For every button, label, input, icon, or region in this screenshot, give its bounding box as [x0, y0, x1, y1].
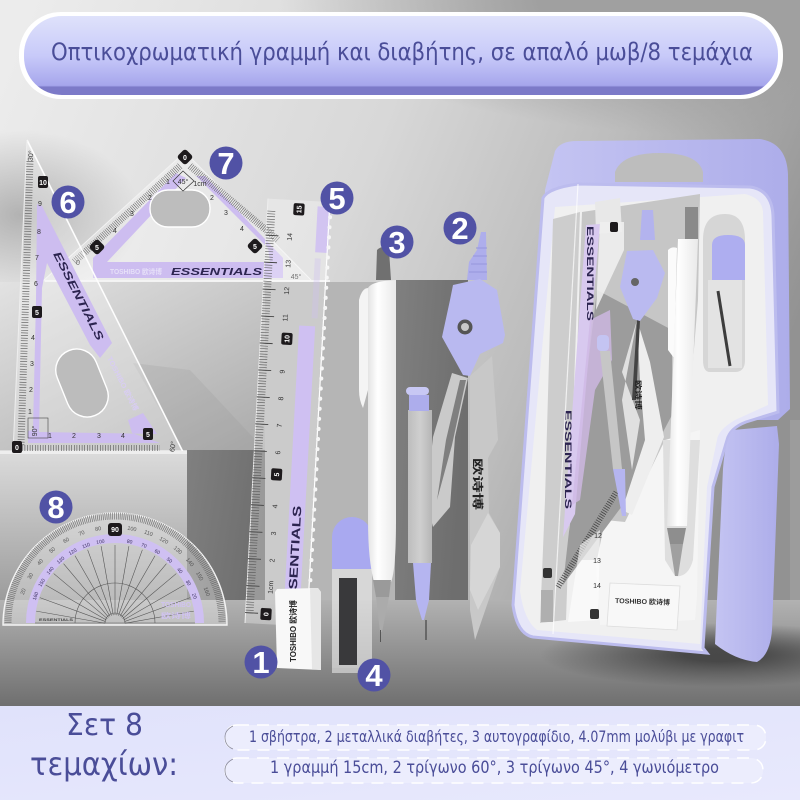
ruler ticks — [250, 209, 271, 613]
outer scale numbers: 110 — [143, 530, 153, 538]
protractor (item 8): ESSENTIALS — [39, 617, 73, 622]
scale numbers: 1cm — [193, 181, 207, 188]
compass right leg — [470, 356, 500, 640]
scale numbers: 15 — [296, 205, 304, 213]
triangle 45 degree (item 7) — [43, 149, 312, 281]
degree ticks — [8, 516, 222, 623]
outer scale numbers: 60 — [62, 537, 71, 545]
scale numbers: 8 — [278, 396, 285, 401]
number badge 6: 6 — [59, 185, 77, 220]
left recess — [540, 212, 580, 623]
purple stripe — [28, 204, 160, 443]
scale numbers: 0 — [263, 612, 271, 616]
scale numbers: 0 — [183, 155, 187, 162]
triangle 60 degree (item 6) — [0, 140, 187, 454]
clear lid fold line — [553, 184, 578, 634]
protractor (item 8): TOSHIBO — [161, 602, 192, 609]
scale numbers: 9 — [280, 369, 287, 374]
number badge 1 — [244, 645, 278, 680]
45 degree marker: 45° — [178, 178, 188, 186]
footer heading: τεμαχίων: — [30, 745, 178, 783]
pen recess — [663, 440, 700, 576]
inner ring numbers: 150 — [38, 578, 47, 588]
inner ring numbers: 50 — [165, 557, 173, 565]
number badge 4: 4 — [365, 658, 383, 693]
90 degree badge — [108, 523, 122, 536]
scale numbers: 2 — [148, 195, 152, 202]
contents line 2 — [225, 758, 763, 783]
protractor (item 8): 欧诗博 — [161, 611, 191, 620]
eraser inside case — [607, 583, 680, 630]
inner ring numbers: 30 — [184, 579, 192, 587]
scale numbers: 3 — [271, 531, 278, 536]
radial lines — [35, 545, 195, 623]
eraser (item 1): TOSHIBO 欧诗博 — [288, 600, 298, 662]
outer scale numbers: 40 — [36, 558, 45, 567]
rulers inside case: 14 — [593, 583, 601, 590]
scale numbers: 4 — [31, 335, 35, 342]
scale numbers: 2 — [210, 195, 214, 202]
footer panel — [0, 706, 800, 800]
inner ring numbers: 130 — [56, 556, 66, 566]
outer scale numbers: 140 — [184, 557, 195, 568]
outer scale numbers: 150 — [194, 571, 204, 582]
compass inside case — [620, 210, 665, 515]
outer scale numbers: 100 — [127, 526, 137, 533]
scale numbers: 1 — [28, 409, 32, 416]
scale numbers — [12, 176, 153, 453]
scale numbers: 9 — [38, 201, 42, 208]
inner ring numbers: 120 — [68, 547, 78, 557]
graphite lead case (item 4) — [332, 517, 372, 673]
outer scale numbers: 20 — [20, 588, 28, 596]
compass brand text: 欧诗博 — [471, 458, 485, 510]
eraser (item 1) — [275, 588, 321, 670]
compass inside case: 欧诗博 — [634, 380, 643, 410]
90 degree badge: 90 — [111, 527, 119, 534]
main recess — [570, 194, 700, 560]
scale numbers: 5 — [95, 245, 99, 252]
back lid with handle — [545, 139, 790, 420]
outer scale numbers: 30 — [27, 572, 35, 581]
mechanical pencil — [406, 387, 432, 640]
outer scale numbers: 50 — [48, 546, 57, 555]
contents line 1 — [225, 725, 766, 750]
number badge 5: 5 — [328, 181, 346, 216]
scale numbers: 1cm — [268, 580, 275, 594]
scale numbers: 7 — [35, 255, 39, 262]
number badge 3 — [380, 225, 414, 260]
inner ring numbers: 100 — [96, 539, 105, 546]
scale numbers: 10 — [39, 180, 47, 187]
compass left leg — [426, 373, 468, 527]
pencil inside case — [597, 335, 626, 516]
scale numbers: 0 — [76, 260, 80, 267]
inner ring numbers: 80 — [126, 539, 133, 546]
scale numbers: 4 — [121, 433, 125, 440]
number badge 2 — [444, 211, 476, 246]
outer scale numbers — [20, 526, 211, 597]
inner ring numbers: 60 — [153, 548, 161, 556]
rulers inside case: 13 — [593, 558, 601, 565]
scale numbers: 0 — [15, 445, 19, 452]
contents line 2: 1 γραμμή 15cm, 2 τρίγωνο 60°, 3 τρίγωνο 45°, 4 γωνιόμετρο — [270, 758, 719, 778]
scale numbers: 3 — [224, 210, 228, 217]
lead case inside case — [703, 214, 745, 372]
angle marker: 60° — [168, 441, 178, 453]
triangle 60 degree (item 6): TOSHIBO 欧诗博 — [105, 355, 140, 412]
rulers inside case — [541, 222, 672, 622]
scale numbers: 2 — [72, 433, 76, 440]
label: essentials on ruler: SENTIALS — [286, 505, 304, 590]
rulers inside case: ESSENTIALS — [563, 410, 573, 509]
compass screw — [458, 320, 472, 334]
number badge 7 — [210, 146, 242, 181]
lower white tray block — [596, 430, 700, 625]
white tray — [520, 194, 768, 644]
inner ring numbers: 20 — [190, 593, 198, 600]
angle marker: 30° — [27, 150, 35, 161]
inner ring numbers: 160 — [32, 591, 40, 601]
scale numbers: 13 — [285, 260, 293, 268]
front lower-right lid — [715, 426, 779, 662]
wavy edge — [308, 207, 331, 606]
outer scale numbers: 80 — [95, 526, 102, 533]
scale numbers: 14 — [287, 233, 294, 241]
inner ring numbers: 140 — [46, 566, 56, 576]
footer heading: Σετ 8 — [66, 708, 143, 743]
outer scale numbers: 130 — [172, 545, 183, 556]
compass head — [442, 279, 505, 376]
number badge 8: 8 — [47, 490, 65, 525]
ruler ticks on left edge — [74, 166, 180, 262]
rulers inside case: ESSENTIALS — [585, 226, 595, 321]
number badge 7: 7 — [217, 146, 235, 181]
scale numbers: 8 — [37, 229, 41, 236]
inner ring numbers: 110 — [81, 542, 91, 550]
scale numbers: 1 — [48, 433, 52, 440]
clear lid outline — [513, 184, 778, 653]
number badge 6 — [52, 185, 84, 220]
scale numbers: 10 — [284, 335, 292, 343]
oval hole — [49, 343, 115, 423]
pen inside case — [667, 207, 698, 576]
inner ring numbers: 40 — [175, 567, 184, 575]
scale numbers: 3 — [97, 433, 101, 440]
inner ring numbers — [32, 539, 198, 601]
scale numbers — [260, 202, 305, 621]
ruler 15cm (item 5) — [245, 199, 331, 626]
number badge 5 — [320, 181, 354, 216]
outer scale numbers: 160 — [202, 586, 211, 597]
number badge 2: 2 — [451, 211, 469, 246]
scale numbers: 11 — [282, 314, 290, 322]
number badge 3: 3 — [388, 225, 406, 260]
scale numbers: 6 — [34, 281, 38, 288]
scale numbers: 4 — [240, 226, 244, 233]
scale numbers: 45° — [291, 273, 301, 281]
scale numbers: 4 — [113, 228, 117, 235]
scale numbers — [76, 149, 301, 281]
45 degree marker — [173, 171, 194, 191]
pencil case (open, with contents) — [513, 139, 790, 662]
scale numbers: 1 — [166, 179, 170, 186]
compass knob — [467, 232, 487, 280]
centre hole — [150, 190, 210, 227]
scale numbers: 7 — [277, 423, 284, 428]
scale numbers: 3 — [130, 211, 134, 218]
ballpoint pen (item 3) — [359, 247, 396, 642]
purple stripes — [285, 206, 331, 590]
scale numbers: 5 — [146, 432, 150, 439]
number badge 1: 1 — [252, 645, 270, 680]
protractor (item 8) — [3, 513, 227, 625]
label: essentials on triangle: ESSENTIALS — [50, 250, 106, 344]
inner ring numbers: 70 — [140, 542, 148, 550]
rulers inside case: 12 — [594, 533, 602, 540]
scale numbers: 5 — [274, 472, 281, 477]
footer heading — [30, 708, 178, 783]
angle marker: 90° — [31, 426, 39, 436]
scale numbers: 6 — [275, 450, 282, 455]
purple ring — [26, 534, 204, 623]
number badge 4 — [358, 658, 390, 693]
scale numbers: 4 — [272, 504, 279, 509]
outer scale numbers: 70 — [78, 530, 86, 538]
label: essentials on triangle: ESSENTIALS — [171, 267, 262, 278]
scale numbers: 2 — [29, 387, 33, 394]
ruler ticks — [21, 160, 30, 445]
scale numbers: 3 — [30, 361, 34, 368]
triangle 45 degree (item 7): TOSHIBO 欧诗博 — [110, 267, 162, 276]
angle marker — [27, 150, 178, 453]
scale numbers: 12 — [284, 287, 291, 295]
scale numbers: 2 — [269, 558, 277, 563]
scale numbers: 5 — [253, 244, 257, 251]
outer scale numbers: 120 — [158, 536, 169, 546]
scale numbers: 5 — [35, 310, 39, 317]
title banner — [19, 12, 783, 99]
number badge 8 — [40, 490, 72, 525]
eraser inside case: TOSHIBO 欧诗博 — [615, 596, 670, 607]
compass (item 2) — [426, 232, 505, 640]
